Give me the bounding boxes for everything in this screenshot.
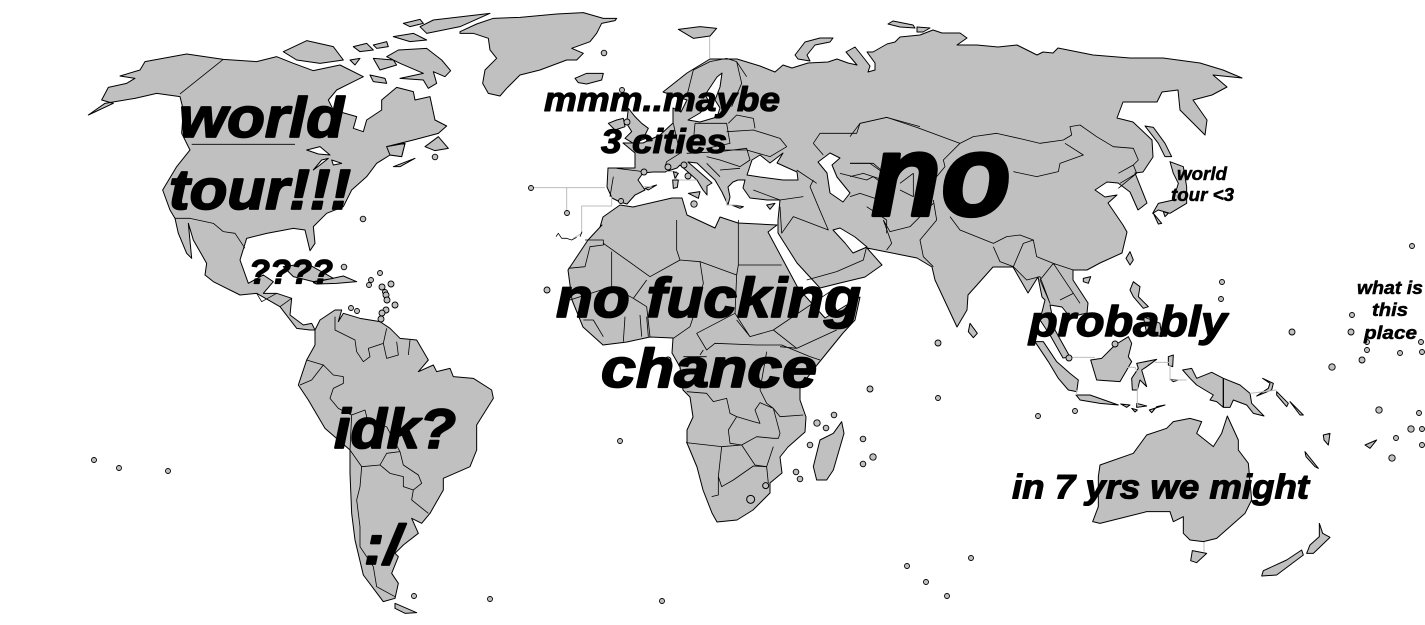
label: what is this place (Pacific): this: [1372, 300, 1408, 320]
label: in 7 yrs we might (Australia): in 7 yrs we might: [1012, 468, 1311, 506]
label: what is this place (Pacific): [1357, 278, 1423, 343]
label: no fucking chance (Africa): no fucking: [556, 266, 861, 329]
label: what is this place (Pacific): place: [1363, 323, 1417, 343]
label: world tour (North America): tour!!!: [169, 158, 351, 222]
label: probably (Southeast Asia): probably: [1028, 298, 1229, 346]
label: world tour (North America): [169, 86, 351, 222]
label: no fucking chance (Africa): chance: [601, 337, 817, 399]
label: mmm..maybe 3 cities (Europe): mmm..maybe: [544, 81, 780, 119]
label: world tour (North America): world: [179, 86, 345, 150]
map: Australia and New Zealand: [1093, 416, 1330, 576]
map: Southeast Asia and Oceania: [1035, 337, 1377, 552]
label: no fucking chance (Africa): [556, 266, 861, 399]
label: :/ (Southern cone): :/: [364, 513, 407, 576]
label: mmm..maybe 3 cities (Europe): 3 cities: [601, 123, 727, 161]
map: Africa: [568, 198, 860, 522]
map: East Asia islands: [968, 126, 1187, 338]
map: Mediterranean islands: [673, 172, 700, 198]
label: ???? (Caribbean): ????: [249, 254, 333, 292]
label: mmm..maybe 3 cities (Europe): [544, 81, 780, 161]
map: South America: [298, 310, 493, 613]
map: North America: [88, 13, 490, 330]
label: no (Asia): no: [871, 110, 1011, 240]
map: Eurasia: [607, 21, 1242, 358]
map: European and Atlantic islands: [531, 27, 775, 240]
label: idk? (South America): idk?: [334, 397, 456, 460]
label: world tour <3 (Japan): [1171, 164, 1234, 205]
map: Greenland: [460, 13, 617, 96]
label: world tour <3 (Japan): tour <3: [1171, 185, 1234, 205]
label: what is this place (Pacific): what is: [1357, 278, 1423, 298]
label: world tour <3 (Japan): world: [1177, 164, 1228, 184]
